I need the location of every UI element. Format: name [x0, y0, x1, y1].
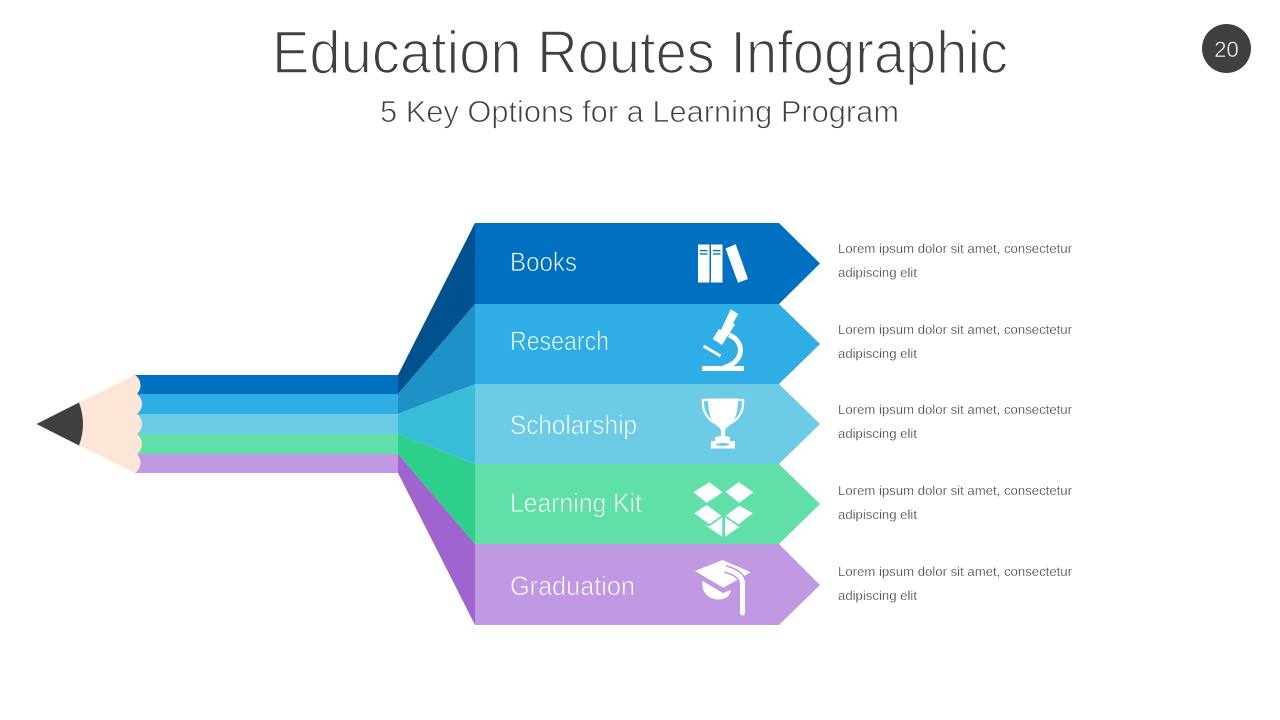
fan connectors: [398, 223, 475, 625]
pencil lead: [36, 402, 83, 446]
text block: books: [838, 241, 1073, 280]
pencil stripes: [135, 375, 398, 473]
panel: books: [475, 223, 820, 304]
text block: books: Lorem ipsum dolor sit amet, consectetur: [838, 241, 1073, 256]
text block: scholarship: adipiscing elit: [838, 426, 917, 441]
panel: learning kit: Learning Kit: [510, 488, 642, 518]
text block: graduation: [838, 564, 1073, 603]
panel: graduation: Graduation: [510, 571, 635, 601]
page number badge: [1202, 24, 1251, 73]
panel: scholarship: [475, 384, 820, 464]
text block: research: Lorem ipsum dolor sit amet, consectetur: [838, 322, 1073, 337]
icon: open box: [693, 482, 753, 537]
pencil wood: [36, 375, 142, 473]
text block: learning kit: Lorem ipsum dolor sit amet, consectetur: [838, 483, 1073, 498]
panel: graduation: [475, 544, 820, 625]
pencil: [36, 375, 398, 473]
text block: graduation: adipiscing elit: [838, 588, 917, 603]
panel: research: Research: [510, 326, 609, 356]
text block: scholarship: Lorem ipsum dolor sit amet, consectetur: [838, 402, 1073, 417]
icon: trophy: [703, 398, 743, 448]
text block: research: adipiscing elit: [838, 346, 917, 361]
title: Education Routes Infographic: [272, 19, 1008, 86]
text block: research: [838, 322, 1073, 361]
text block: graduation: Lorem ipsum dolor sit amet, consectetur: [838, 564, 1073, 579]
text block: scholarship: [838, 402, 1073, 441]
text block: books: adipiscing elit: [838, 265, 917, 280]
text block: learning kit: adipiscing elit: [838, 507, 917, 522]
panel: learning kit: [475, 464, 820, 544]
icon: books: [698, 244, 748, 283]
page number badge: 20: [1214, 37, 1239, 62]
panel: books: Books: [510, 247, 577, 277]
subtitle: 5 Key Options for a Learning Program: [380, 94, 899, 129]
icon: microscope: [702, 309, 744, 371]
panel: research: [475, 304, 820, 384]
panel: scholarship: Scholarship: [510, 410, 637, 440]
icon: graduation cap: [695, 560, 751, 613]
text block: learning kit: [838, 483, 1073, 522]
